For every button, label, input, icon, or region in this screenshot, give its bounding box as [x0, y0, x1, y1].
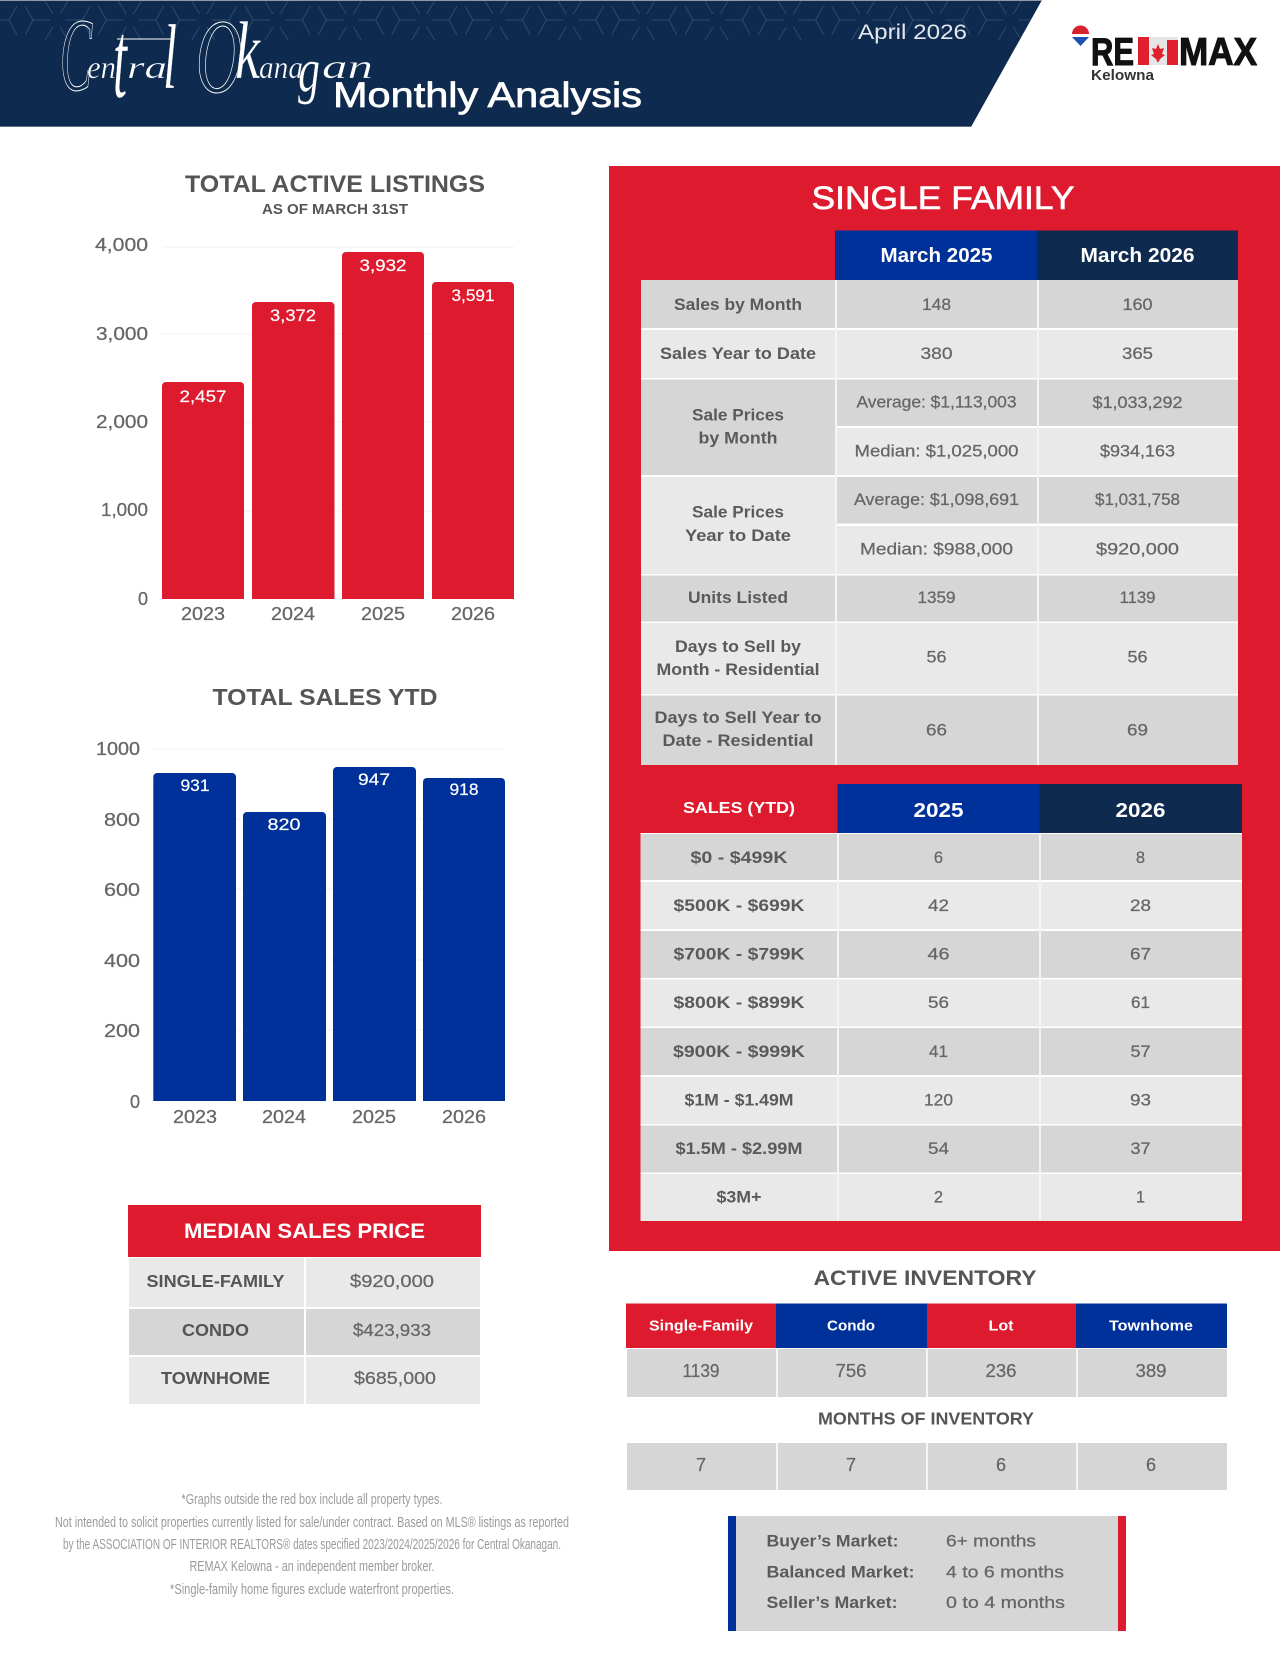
legend: market definitions: 0 to 4 months — [946, 1593, 1065, 1612]
table: sales ytd by price range: SALES (YTD) — [683, 800, 795, 817]
row: single-family: SINGLE-FAMILY — [146, 1271, 285, 1291]
bar values: 820 — [268, 815, 300, 834]
row: $500K - $699K — [640, 882, 1242, 929]
row: days to sell by month: 56 — [1128, 648, 1148, 666]
heading: total active listings: AS OF MARCH 31ST — [262, 202, 408, 218]
row group: sale prices by month — [641, 380, 1238, 475]
year labels: 2023 — [173, 1107, 217, 1127]
row group: sale prices by month: $934,163 — [1100, 442, 1175, 460]
logo: RE/MAX Kelowna: RE — [1091, 31, 1134, 74]
row: $0 - $499K — [640, 834, 1242, 880]
table: active inventory — [626, 1304, 1227, 1397]
row: $1M - $1.49M: 93 — [1130, 1092, 1151, 1110]
row: $1M - $1.49M: 120 — [924, 1092, 953, 1110]
year labels: 2026 — [442, 1107, 486, 1127]
table: active inventory: Lot — [988, 1318, 1014, 1334]
row: units listed — [641, 576, 1238, 622]
table: monthly comparison — [641, 230, 1238, 765]
row: $1.5M - $2.99M: 54 — [928, 1140, 949, 1158]
row: days to sell year to date: Days to Sell Year to — [654, 709, 822, 727]
table: active inventory: Condo — [827, 1318, 875, 1334]
row: sales by month: 160 — [1122, 296, 1152, 314]
table: monthly comparison: March 2025 — [880, 245, 992, 267]
row: $700K - $799K: 67 — [1130, 946, 1151, 964]
row: days to sell by month: 56 — [926, 648, 946, 666]
year labels: 2023 — [181, 604, 225, 624]
footnote — [55, 1491, 569, 1598]
row: $700K - $799K: 46 — [928, 946, 950, 964]
y axis labels: 0 — [130, 1092, 140, 1112]
row: single-family — [129, 1258, 480, 1307]
row: $800K - $899K — [640, 980, 1242, 1026]
row: $700K - $799K — [640, 931, 1242, 978]
table: months of inventory: 7 — [846, 1455, 856, 1475]
row: $3M+: $3M+ — [716, 1188, 762, 1206]
row: days to sell year to date — [641, 696, 1238, 765]
legend: market definitions: Seller’s Market: — [766, 1593, 898, 1612]
script title: l — [163, 6, 177, 108]
year labels: 2024 — [262, 1107, 306, 1127]
row: condo: $423,933 — [353, 1320, 431, 1340]
row: $3M+ — [640, 1174, 1242, 1221]
y axis labels: 1,000 — [101, 500, 148, 520]
script title: ana — [259, 49, 303, 85]
bar values — [180, 770, 478, 834]
table: months of inventory: 6 — [996, 1455, 1006, 1475]
row group: sale prices year to date: Median: $988,000 — [860, 540, 1013, 558]
y axis labels: 800 — [104, 810, 140, 830]
row: condo — [129, 1309, 480, 1355]
row: townhome: TOWNHOME — [161, 1368, 270, 1388]
legend: market definitions: Balanced Market: — [766, 1562, 914, 1582]
y axis labels — [95, 235, 148, 609]
table: sales ytd by price range — [640, 784, 1242, 1221]
y axis labels: 3,000 — [96, 324, 148, 344]
row group: sale prices year to date: $920,000 — [1096, 540, 1179, 558]
panel: single family — [609, 166, 1280, 1251]
bars — [153, 767, 505, 1101]
row: $700K - $799K: $700K - $799K — [674, 946, 805, 964]
table: months of inventory: 7 — [696, 1455, 706, 1475]
row: $500K - $699K: 42 — [928, 897, 949, 915]
header banner — [0, 0, 1042, 127]
row: days to sell year to date: Date - Residential — [662, 732, 814, 750]
bar chart: total active listings — [95, 235, 514, 624]
year labels: 2025 — [352, 1107, 396, 1127]
row: sales by month — [641, 280, 1238, 328]
row: sales by month: 148 — [922, 296, 951, 314]
footnote: by the ASSOCIATION OF INTERIOR REALTORS® dates specified 2023/2024/2025/2026 for Central Okanagan. — [63, 1536, 561, 1553]
script title: an — [322, 49, 373, 86]
row: inventory counts: 389 — [1136, 1361, 1166, 1381]
logo: RE/MAX Kelowna: Kelowna — [1091, 68, 1155, 84]
script title: O — [196, 0, 242, 115]
script title: C — [60, 0, 93, 113]
row group: sale prices by month: $1,033,292 — [1092, 394, 1182, 412]
row: $900K - $999K: 57 — [1130, 1043, 1150, 1061]
heading: total sales ytd: TOTAL SALES YTD — [212, 684, 438, 710]
logo: RE/MAX Kelowna — [1072, 26, 1257, 84]
table: active inventory: Townhome — [1109, 1318, 1193, 1334]
script title: t — [113, 0, 128, 121]
row: $1.5M - $2.99M: $1.5M - $2.99M — [676, 1140, 802, 1158]
row group: sale prices year to date: Year to Date — [685, 527, 791, 545]
row: inventory counts — [627, 1349, 1227, 1397]
row group: sale prices year to date: $1,031,758 — [1095, 491, 1180, 509]
script title: ra — [127, 49, 167, 85]
row: condo: CONDO — [182, 1320, 249, 1340]
y axis labels: 200 — [104, 1021, 140, 1041]
row: $500K - $699K: 28 — [1130, 897, 1151, 915]
legend: market definitions: 4 to 6 months — [946, 1562, 1064, 1582]
bar values — [180, 256, 494, 406]
row: $800K - $899K: 61 — [1131, 994, 1150, 1012]
y axis labels: 400 — [104, 951, 140, 971]
bars — [162, 252, 514, 599]
bar values: 947 — [358, 770, 390, 789]
row: $0 - $499K: 6 — [934, 849, 943, 867]
row: days to sell by month — [641, 623, 1238, 694]
row group: sale prices year to date: Sale Prices — [692, 504, 784, 522]
bar values: 918 — [450, 780, 478, 799]
row: $0 - $499K: $0 - $499K — [690, 849, 788, 867]
bar values: 3,372 — [270, 306, 316, 325]
icon: Canadian flag — [1138, 37, 1178, 65]
bar chart: total sales ytd — [96, 739, 505, 1127]
heading: months of inventory: MONTHS OF INVENTORY — [818, 1408, 1034, 1428]
bar values: 3,932 — [360, 256, 406, 275]
row group: sale prices by month: by Month — [698, 430, 778, 448]
icon: balloon — [1072, 26, 1089, 46]
row: townhome: $685,000 — [354, 1368, 436, 1388]
row group: sale prices year to date — [641, 477, 1238, 574]
year labels: 2025 — [361, 604, 405, 624]
row: $900K - $999K — [640, 1028, 1242, 1075]
row: units listed: 1139 — [1120, 589, 1156, 607]
row: inventory counts: 236 — [986, 1361, 1016, 1381]
heading: total active listings — [185, 171, 485, 218]
footnote: *Single-family home figures exclude waterfront properties. — [170, 1581, 454, 1598]
year labels — [181, 604, 495, 624]
row: days to sell by month: Days to Sell by — [675, 638, 802, 656]
row: $1.5M - $2.99M: 37 — [1130, 1140, 1150, 1158]
row: $500K - $699K: $500K - $699K — [674, 897, 805, 915]
row: sales year to date: Sales Year to Date — [660, 345, 816, 363]
table: sales ytd by price range: 2025 — [914, 800, 964, 822]
row group: sale prices by month: Average: $1,113,003 — [856, 394, 1016, 412]
row group: sale prices by month: Sale Prices — [692, 406, 784, 424]
legend: market definitions: Buyer’s Market: — [766, 1532, 898, 1550]
table: active inventory: Single-Family — [649, 1318, 754, 1334]
row: inventory counts: 756 — [836, 1361, 866, 1381]
table: sales ytd by price range: 2026 — [1116, 800, 1166, 822]
script title: k — [235, 5, 261, 96]
y axis labels — [96, 739, 140, 1112]
row: sales year to date — [641, 330, 1238, 378]
row: units listed: Units Listed — [688, 589, 788, 607]
script title: g — [298, 37, 320, 105]
row: $1.5M - $2.99M — [640, 1126, 1242, 1172]
row group: sale prices year to date: Average: $1,098,691 — [854, 491, 1019, 509]
row: $1M - $1.49M — [640, 1077, 1242, 1124]
row: townhome — [129, 1357, 480, 1404]
y axis labels: 2,000 — [96, 412, 148, 432]
y axis labels: 600 — [104, 880, 140, 900]
row: single-family: $920,000 — [350, 1271, 434, 1291]
year labels — [173, 1107, 486, 1127]
row: days to sell year to date: 69 — [1127, 722, 1148, 740]
row: $1M - $1.49M: $1M - $1.49M — [684, 1092, 794, 1110]
bar values: 931 — [180, 776, 210, 795]
row: inventory counts: 1139 — [682, 1361, 720, 1381]
bar values: 2,457 — [180, 387, 226, 406]
footnote: *Graphs outside the red box include all property types. — [182, 1491, 442, 1508]
table: months of inventory — [627, 1443, 1227, 1490]
row: $0 - $499K: 8 — [1136, 849, 1145, 867]
row: $800K - $899K: $800K - $899K — [674, 994, 805, 1012]
script title: en — [87, 49, 116, 85]
heading: total active listings: TOTAL ACTIVE LISTINGS — [185, 171, 485, 198]
date: April 2026 — [858, 21, 967, 44]
table: months of inventory: 6 — [1146, 1455, 1156, 1475]
row: $900K - $999K: $900K - $999K — [673, 1043, 805, 1061]
table: median sales price: MEDIAN SALES PRICE — [184, 1220, 425, 1243]
heading: active inventory: ACTIVE INVENTORY — [814, 1267, 1036, 1290]
row: days to sell year to date: 66 — [926, 722, 947, 740]
y axis labels: 1000 — [96, 739, 140, 759]
panel title: SINGLE FAMILY — [812, 180, 1074, 216]
row: sales year to date: 365 — [1122, 345, 1153, 363]
row: $3M+: 1 — [1136, 1188, 1145, 1206]
row: sales by month: Sales by Month — [674, 296, 802, 314]
year labels: 2026 — [451, 604, 495, 624]
row: units listed: 1359 — [918, 589, 956, 607]
row: $800K - $899K: 56 — [928, 994, 949, 1012]
legend: market definitions — [728, 1516, 1126, 1631]
logo: RE/MAX Kelowna: MAX — [1179, 31, 1257, 74]
table: monthly comparison: March 2026 — [1080, 245, 1194, 267]
subtitle: Monthly Analysis — [333, 76, 642, 115]
table: median sales price — [128, 1205, 481, 1404]
row: sales year to date: 380 — [920, 345, 952, 363]
footnote: Not intended to solicit properties currently listed for sale/under contract. Based on MLS® listings as reported — [55, 1514, 569, 1531]
y axis labels: 4,000 — [95, 235, 148, 255]
y axis labels: 0 — [138, 589, 148, 609]
year labels: 2024 — [271, 604, 315, 624]
footnote: REMAX Kelowna - an independent member broker. — [190, 1558, 434, 1575]
row: $3M+: 2 — [934, 1188, 943, 1206]
bar values: 3,591 — [452, 286, 494, 305]
legend: market definitions: 6+ months — [946, 1532, 1036, 1550]
row: days to sell by month: Month - Residential — [656, 661, 820, 679]
row group: sale prices by month: Median: $1,025,000 — [854, 442, 1018, 460]
row: $900K - $999K: 41 — [929, 1043, 948, 1061]
